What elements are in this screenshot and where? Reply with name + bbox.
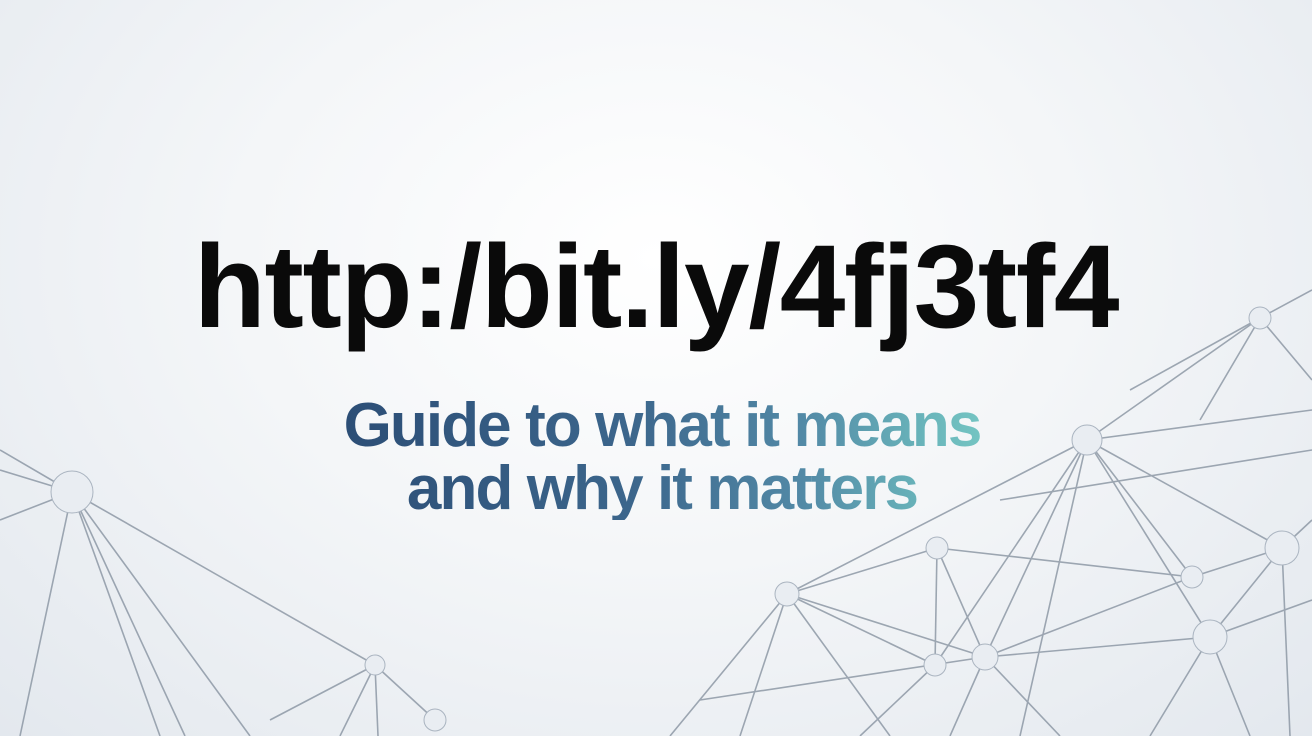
subtitle: Guide to what it means [344, 391, 980, 460]
subtitle: and why it matters [407, 454, 917, 523]
title: http:/bit.ly/4fj3tf4 [194, 221, 1118, 353]
subtitle [344, 391, 980, 523]
